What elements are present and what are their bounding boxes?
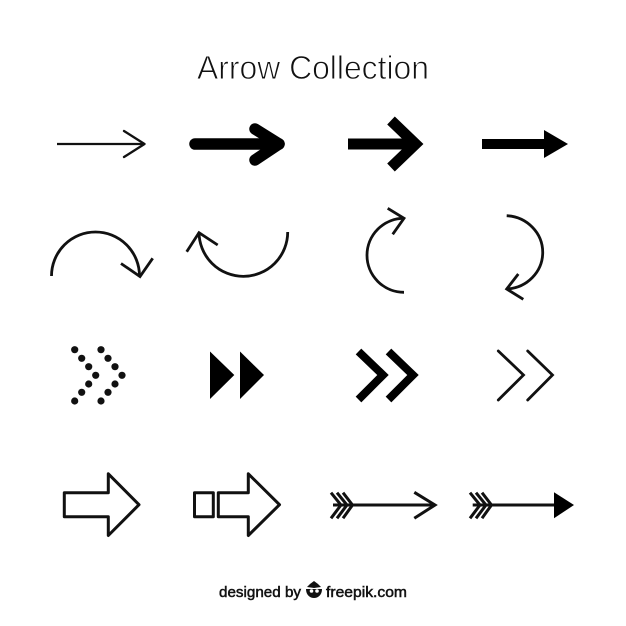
icon: freepik logo [306,581,322,598]
icon: outlined block arrow with square tail [194,474,280,536]
icon: thin line arrow [57,131,144,157]
icon: fletched arrow with open head [331,492,435,518]
icon: bold double chevron [358,352,413,400]
icon: thin double chevron [498,351,552,400]
icon: fletched arrow with solid head [470,492,574,518]
icon: double solid triangles [210,352,264,399]
icon: curved arrow over the top [52,232,153,276]
icon: bold square arrow [348,120,416,168]
icon: dotted double chevron [71,346,126,405]
footer credit [219,581,407,601]
footer credit: designed by [219,585,302,601]
footer credit: freepik.com [326,585,407,601]
title: Arrow Collection [197,49,429,86]
icon: bold rounded arrow [195,129,279,160]
icon: outlined block arrow [64,474,139,536]
icon: circular arrow left side [367,208,404,292]
icon: curved arrow under the bottom [187,232,288,276]
icon: solid triangle head arrow [482,130,568,158]
icon: circular arrow right side [507,216,543,299]
